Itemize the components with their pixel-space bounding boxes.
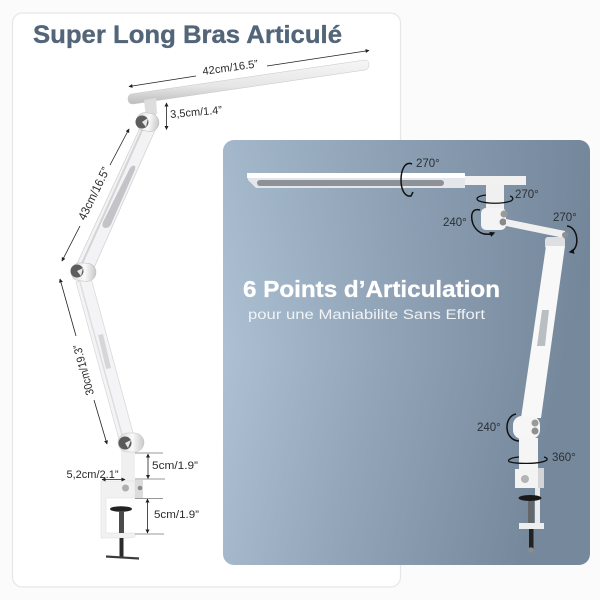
- post: [519, 438, 538, 470]
- heading: articulation: 6 Points d’Articulation: [243, 276, 500, 302]
- dimension: lower arm: [60, 279, 107, 444]
- dimension: bar width: [129, 50, 369, 86]
- short arm: [506, 219, 565, 238]
- rotation: second joint 270: [553, 212, 577, 252]
- rotation: neck 270: 270°: [515, 189, 539, 201]
- lamp head bar: [128, 60, 369, 104]
- panel: articulation points: [223, 140, 590, 565]
- lamp head: [247, 173, 526, 188]
- panel: lamp dimensions card: [12, 13, 400, 587]
- rotation: lower joint 240: [477, 414, 519, 441]
- bottom joint: [118, 433, 144, 452]
- rotation: base 360: 360°: [552, 452, 576, 464]
- dimension: neck height: [166, 103, 223, 130]
- dimension: clamp opening: [135, 498, 199, 534]
- neck: [144, 98, 157, 118]
- dimension: clamp opening: 5cm/1.9”: [154, 509, 199, 521]
- top joint: [135, 111, 160, 133]
- lower arm: [76, 278, 135, 443]
- rotation: base 360: [509, 452, 576, 464]
- rotation: neck 270: [477, 189, 539, 203]
- dimension: lower arm: 30cm/19.3”: [72, 343, 97, 396]
- first joint: [481, 208, 508, 230]
- dimension: bar width: 42cm/16.5”: [202, 58, 259, 78]
- clamp: [101, 480, 143, 558]
- lamp: articulation view: [247, 173, 568, 553]
- rotation: head 270: 270°: [416, 158, 440, 170]
- dimension: post height: [135, 453, 198, 479]
- lower joint: [513, 416, 540, 439]
- post: [121, 450, 135, 481]
- rotation: first joint 240: [443, 210, 494, 234]
- lamp: dimension view: [70, 60, 369, 558]
- upper arm: [75, 128, 156, 270]
- middle joint: [70, 262, 96, 282]
- rotation: first joint 240: 240°: [443, 217, 467, 229]
- dimension: clamp width: 5,2cm/2.1”: [66, 469, 119, 481]
- clamp: [515, 468, 544, 553]
- neck: [486, 185, 504, 209]
- dimension: upper arm: [62, 129, 129, 261]
- long arm: [521, 246, 565, 418]
- dimension: neck height: 3,5cm/1.4”: [170, 104, 223, 121]
- rotation: second joint 270: 270°: [553, 212, 577, 224]
- dimension: post height: 5cm/1.9”: [152, 460, 198, 472]
- rotation: lower joint 240: 240°: [477, 422, 501, 434]
- title: Super Long Bras Articulé: [33, 21, 342, 49]
- rotation: head 270: [401, 158, 440, 196]
- dimension: upper arm: 43cm/16.5”: [75, 165, 113, 222]
- second joint: [545, 232, 568, 249]
- subheading: pour une Maniabilite Sans Effort: [248, 307, 485, 322]
